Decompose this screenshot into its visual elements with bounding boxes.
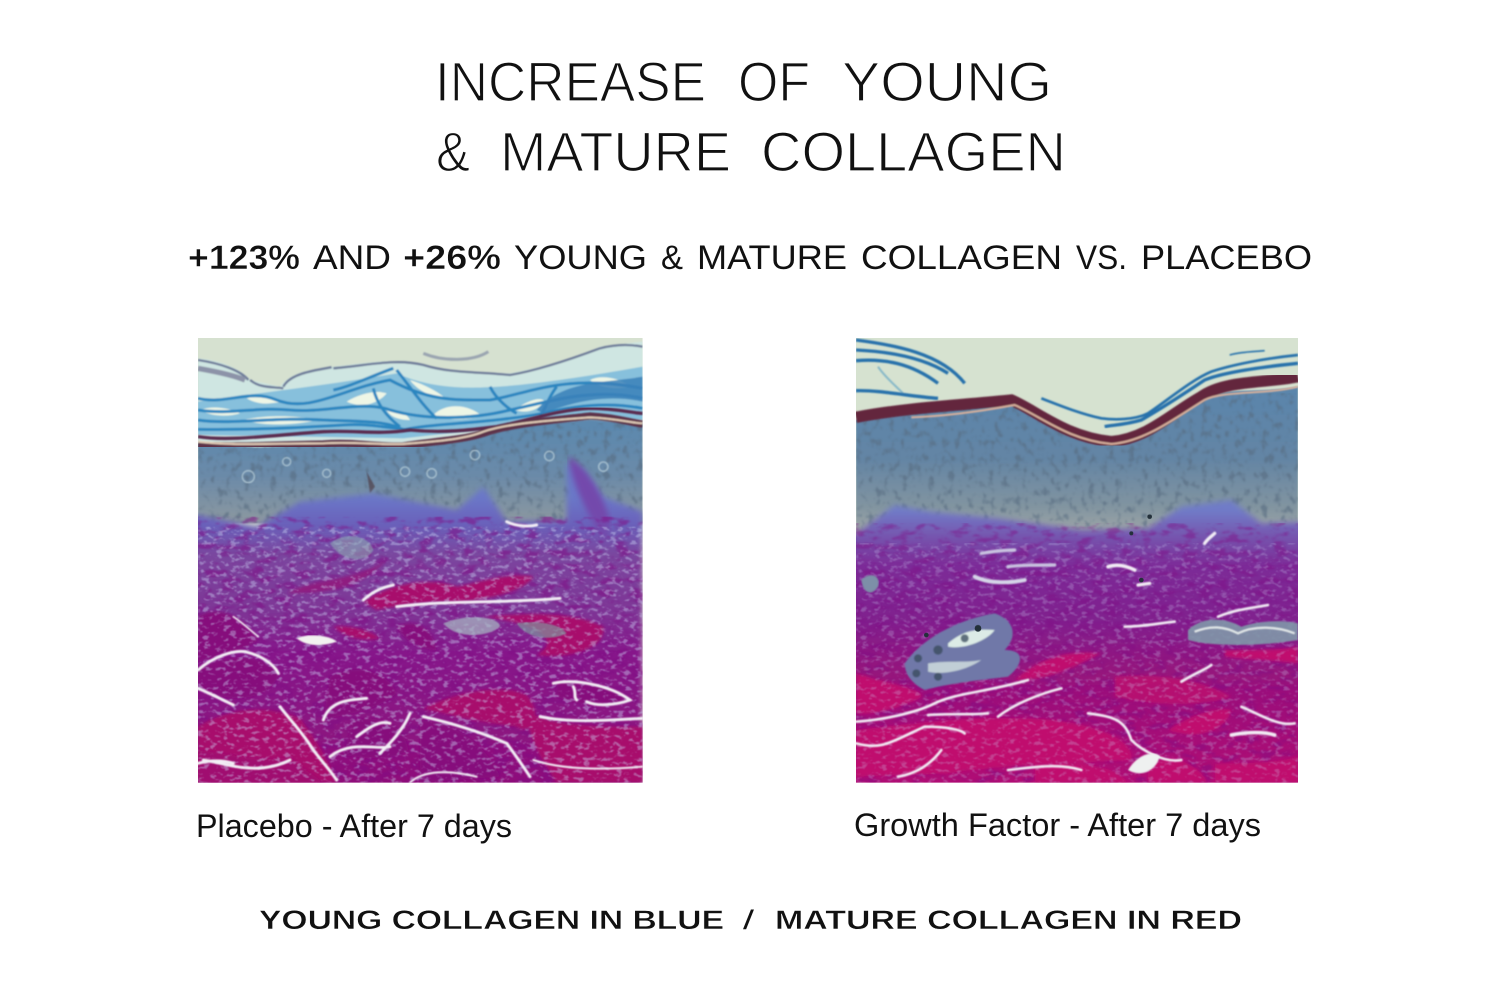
epidermis (856, 387, 1298, 533)
title: YOUNG (842, 50, 1052, 113)
stratum band, red-brown (198, 408, 643, 446)
caption: growth factor: Growth Factor - After 7 days (854, 807, 1261, 843)
white fibre gaps (856, 533, 1295, 777)
pale connective-tissue texture (198, 527, 643, 783)
dermis with collagen (848, 500, 1305, 790)
vessel cluster (905, 613, 1298, 690)
stratum band, red-brown (856, 377, 1298, 444)
subtitle: collagen increase vs placebo: COLLAGEN (861, 239, 1062, 277)
dermis with collagen (190, 457, 643, 790)
legend: colour key: / (743, 905, 755, 935)
legend: colour key: YOUNG COLLAGEN IN BLUE (259, 905, 724, 935)
subtitle: collagen increase vs placebo: VS. (1076, 239, 1127, 277)
title: MATURE (500, 120, 731, 183)
pale connective-tissue texture (856, 543, 1298, 783)
white fibre gaps (198, 522, 643, 783)
background above skin (198, 338, 643, 783)
epidermis (198, 420, 643, 523)
subtitle: collagen increase vs placebo (188, 239, 1312, 277)
subtitle: collagen increase vs placebo: +123% (188, 239, 300, 277)
title: OF (738, 50, 810, 113)
background above skin (856, 338, 1298, 535)
subtitle: collagen increase vs placebo: MATURE (697, 239, 847, 277)
legend: colour key (259, 905, 1242, 935)
subtitle: collagen increase vs placebo: AND (313, 239, 391, 277)
subtitle: collagen increase vs placebo: PLACEBO (1141, 239, 1312, 277)
legend: colour key: MATURE COLLAGEN IN RED (775, 905, 1242, 935)
subtitle: collagen increase vs placebo: +26% (403, 239, 501, 277)
magenta mature collagen bundles (856, 647, 1298, 783)
subtitle: collagen increase vs placebo: YOUNG (514, 239, 647, 277)
title: INCREASE (435, 50, 706, 113)
magenta mature collagen bundles (198, 560, 643, 783)
title (435, 50, 1066, 183)
caption: placebo: Placebo - After 7 days (196, 808, 512, 844)
micrograph: placebo skin section (190, 338, 643, 790)
subtitle: collagen increase vs placebo: & (661, 239, 683, 277)
title: & (436, 120, 470, 183)
micrograph: growth factor skin section (848, 338, 1305, 790)
title: COLLAGEN (761, 120, 1066, 183)
detached corneum flakes and blue lines (856, 340, 1298, 427)
stratum corneum with blue lines (198, 342, 643, 447)
infographic canvas (190, 62, 1310, 930)
